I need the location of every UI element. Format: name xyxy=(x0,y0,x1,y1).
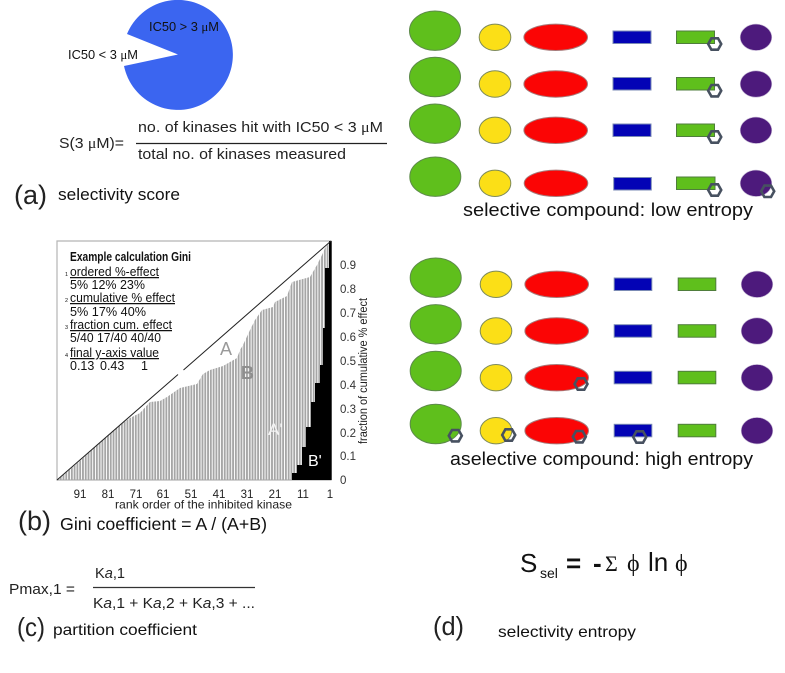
caption a: selectivity score xyxy=(58,186,180,204)
example calculation text: cumulative % effect xyxy=(70,291,176,305)
Gini formula: Gini coefficient = A / (A+B) xyxy=(60,514,267,534)
panel d bottom: aselective compound xyxy=(410,258,773,469)
label b: (b) xyxy=(18,506,51,536)
y axis tick labels: 0.2 xyxy=(340,428,356,440)
example calculation text: 0.43 xyxy=(100,359,124,373)
entropy formula: Σ xyxy=(605,551,618,576)
example calculation text: 4 xyxy=(65,353,68,359)
x axis tick labels: 21 xyxy=(269,489,281,501)
formula numerator: no. of kinases hit with IC50 < 3 μM xyxy=(138,119,383,136)
panel c: partition coefficient xyxy=(9,565,255,642)
caption c: partition coefficient xyxy=(53,622,198,639)
example calculation text: 3 xyxy=(65,325,68,331)
example calculation text: Example calculation Gini xyxy=(70,250,191,264)
formula denominator: total no. of kinases measured xyxy=(138,146,346,163)
entropy formula: ϕ xyxy=(675,551,688,577)
y axis tick labels: 0.5 xyxy=(340,356,356,368)
x axis tick labels: 81 xyxy=(102,489,114,501)
formula fraction bar xyxy=(93,586,255,588)
area labels: B' xyxy=(308,453,322,470)
label a: (a) xyxy=(14,180,47,210)
entropy formula: S xyxy=(520,548,537,578)
caption: selective compound: selective compound: low entropy xyxy=(463,199,754,220)
entropy formula: ϕ xyxy=(627,551,640,577)
caption d: selectivity entropy xyxy=(498,624,636,641)
x axis tick labels: 51 xyxy=(185,489,197,501)
row 1 xyxy=(410,11,772,50)
area labels xyxy=(220,339,322,470)
formula left side: S(3 μM)= xyxy=(59,135,124,152)
example calculation text xyxy=(65,250,191,373)
example calculation text: 2 xyxy=(65,298,68,304)
label d: (d) xyxy=(433,611,464,641)
example calculation text: fraction cum. effect xyxy=(70,318,173,332)
y axis title: fraction of cumulative % effect xyxy=(358,297,370,444)
entropy formula: - xyxy=(593,548,602,578)
example calculation text: 5/40 17/40 40/40 xyxy=(70,331,161,345)
y axis tick labels: 0.4 xyxy=(340,380,357,392)
y axis tick labels: 0.3 xyxy=(340,404,356,416)
y axis tick labels: 0.8 xyxy=(340,284,356,296)
x axis tick labels: 71 xyxy=(130,489,142,501)
panel d top: selective compound xyxy=(410,11,774,220)
y axis tick labels: 0 xyxy=(340,475,346,487)
example calculation text: 5% 12% 23% xyxy=(70,278,145,292)
y axis tick labels: 0.1 xyxy=(340,451,356,463)
formula fraction bar xyxy=(136,142,387,144)
area labels: B xyxy=(241,363,254,383)
row 2 xyxy=(410,57,772,97)
panel a: selectivity score xyxy=(14,0,387,210)
area labels: A xyxy=(220,339,232,359)
example calculation text: 1 xyxy=(141,359,148,373)
panel b: Gini chart xyxy=(18,241,370,536)
x axis tick labels: 41 xyxy=(213,489,225,501)
panel d formula: selectivity entropy xyxy=(433,547,688,641)
label c: (c) xyxy=(17,612,45,642)
pie chart xyxy=(124,0,233,110)
x axis tick labels: 31 xyxy=(241,489,253,501)
entropy formula xyxy=(520,547,688,581)
black bars area xyxy=(292,241,332,480)
row 4 xyxy=(410,157,774,197)
grey bars xyxy=(57,241,331,480)
entropy formula: = xyxy=(566,548,581,578)
row 2 xyxy=(410,305,773,344)
entropy formula: ln xyxy=(648,547,668,577)
x axis tick labels: 1 xyxy=(327,489,333,501)
formula denominator: Ka,1 + Ka,2 + Ka,3 + ... xyxy=(93,595,255,612)
pie label: below threshold: IC50 < 3 μM xyxy=(68,48,138,62)
example calculation text: 1 xyxy=(65,272,68,278)
x axis tick labels: 91 xyxy=(74,489,86,501)
example calculation text: 0.13 xyxy=(70,359,94,373)
example calculation text: final y-axis value xyxy=(70,346,159,360)
pie label: above threshold: IC50 > 3 μM xyxy=(149,20,219,34)
x axis title: rank order of the inhibited kinase xyxy=(115,498,292,512)
example calculation text: ordered %-effect xyxy=(70,265,160,279)
diagonal line xyxy=(57,241,331,480)
row 3 xyxy=(410,351,773,391)
row 4 xyxy=(410,404,773,444)
row 3 xyxy=(410,104,772,144)
entropy formula: sel xyxy=(540,565,558,581)
area labels: A' xyxy=(268,420,283,439)
x axis tick labels: 61 xyxy=(157,489,169,501)
x axis tick labels xyxy=(74,489,333,501)
formula left side: Pmax,1 = xyxy=(9,581,75,598)
y axis tick labels: 0.6 xyxy=(340,332,356,344)
y axis tick labels: 0.7 xyxy=(340,308,356,320)
caption: aselective compound: aselective compound: high entropy xyxy=(450,448,754,469)
example calculation text: 5% 17% 40% xyxy=(70,305,146,319)
row 1 xyxy=(410,258,773,297)
formula numerator: Ka,1 xyxy=(95,565,125,582)
y axis tick labels xyxy=(340,260,357,487)
y axis tick labels: 0.9 xyxy=(340,260,356,272)
x axis tick labels: 11 xyxy=(297,489,309,501)
chart frame xyxy=(57,241,331,480)
